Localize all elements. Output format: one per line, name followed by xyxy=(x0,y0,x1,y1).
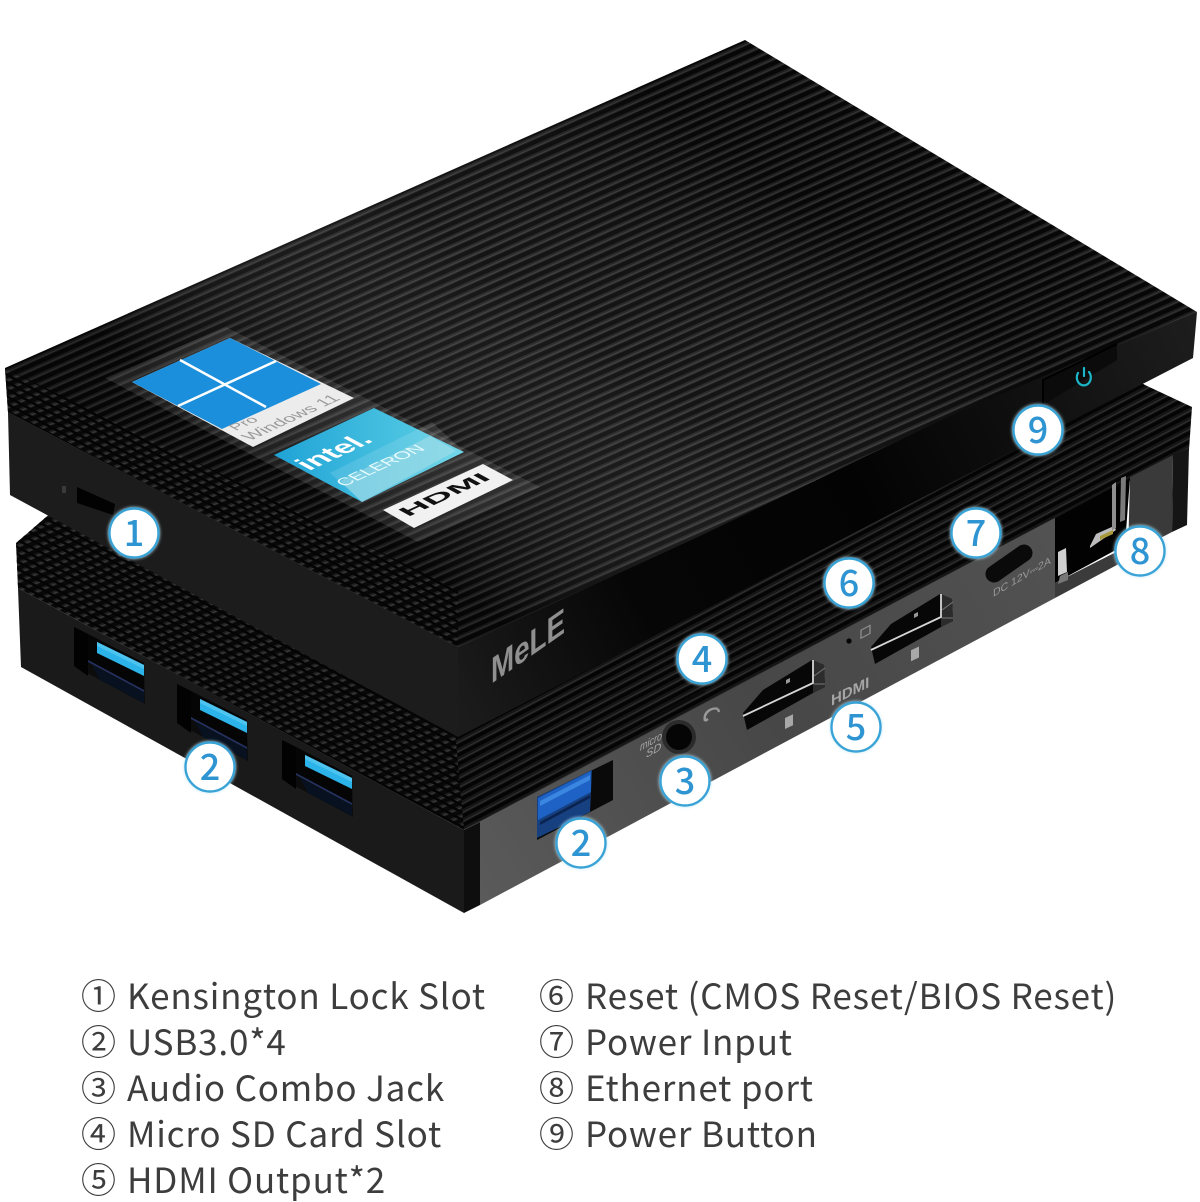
legend: port list: Kensington Lock Slot xyxy=(127,969,486,1020)
intel celeron sticker: intel. xyxy=(288,430,380,474)
callouts xyxy=(110,402,1164,868)
usb ports on left side xyxy=(74,627,353,817)
legend: port list: ⑦ xyxy=(539,1015,575,1066)
callout 9 xyxy=(1014,402,1062,454)
legend: port list: ② xyxy=(81,1015,117,1066)
brand logo: MeLE xyxy=(491,600,565,692)
micro sd label: micro xyxy=(640,728,662,754)
lower unit: finned top left side xyxy=(16,505,470,830)
upper unit: finned left edge xyxy=(5,368,458,647)
legend: port list: ③ xyxy=(81,1061,117,1112)
hdmi sticker xyxy=(383,464,513,528)
legend item 5 xyxy=(81,1153,386,1202)
legend: port list: Reset (CMOS Reset/BIOS Reset) xyxy=(585,969,1117,1020)
icon: headphones xyxy=(705,709,719,721)
callout 4: 4 xyxy=(692,631,712,683)
sticker glossy backing xyxy=(105,327,540,542)
legend item 7 xyxy=(539,1015,793,1066)
legend item 1 xyxy=(81,969,486,1020)
micro sd slot xyxy=(645,688,705,724)
callout 2 plate: 2 xyxy=(571,815,591,867)
icon: power xyxy=(1077,368,1091,385)
callout 7: 7 xyxy=(966,505,986,557)
kensington lock slot xyxy=(62,486,115,515)
hdmi sticker: HDMI xyxy=(393,470,496,519)
reset hole xyxy=(846,638,852,644)
lower unit: bottom lip xyxy=(1055,545,1130,598)
callout 1 xyxy=(110,505,158,558)
legend: port list: ④ xyxy=(81,1107,117,1158)
ethernet port xyxy=(1055,476,1130,584)
upper unit: finned top xyxy=(5,40,1197,647)
lower unit: grey port plate xyxy=(480,518,1055,905)
windows 11 sticker: Windows 11 xyxy=(237,392,345,443)
legend: port list: ⑧ xyxy=(539,1061,575,1112)
lower unit: finned band along port side xyxy=(455,376,1192,830)
legend: port list: Ethernet port xyxy=(585,1061,814,1112)
legend: port list: Power Button xyxy=(585,1107,818,1158)
hdmi port 1 number xyxy=(785,714,793,729)
callout 6 xyxy=(824,555,874,608)
legend item 6 xyxy=(539,969,1117,1020)
callout 2 left: 2 xyxy=(200,739,220,791)
legend: port list: Audio Combo Jack xyxy=(127,1061,445,1112)
callout 8: 8 xyxy=(1130,523,1150,575)
hdmi port 2 xyxy=(871,594,953,664)
legend: port list: ⑥ xyxy=(539,969,575,1020)
upper unit: right flat side xyxy=(458,312,1197,737)
legend item 8 xyxy=(539,1061,814,1112)
windows 11 sticker xyxy=(132,338,354,447)
legend: port list: ⑨ xyxy=(539,1107,575,1158)
callout 4 xyxy=(678,631,726,684)
legend item 4 xyxy=(81,1107,442,1158)
dc label: DC 12V⎓2A xyxy=(993,555,1051,600)
micro sd label xyxy=(640,728,662,761)
legend: port list: Power Input xyxy=(585,1015,793,1066)
intel celeron sticker: CELERON xyxy=(331,442,429,489)
lower unit: corner post xyxy=(464,822,480,913)
upper unit xyxy=(5,40,1197,737)
callout 9: 9 xyxy=(1028,402,1048,454)
callout 3: 3 xyxy=(675,753,695,805)
callout 6: 6 xyxy=(839,555,859,607)
lower unit xyxy=(16,376,1192,913)
hdmi port 2 number xyxy=(911,646,919,661)
usb-c power input xyxy=(994,553,1024,574)
legend item 9 xyxy=(539,1107,818,1158)
power button xyxy=(1043,344,1117,405)
reset icon xyxy=(861,625,870,638)
callout 3 xyxy=(660,753,710,806)
callout 7 xyxy=(952,505,1000,558)
windows 11 sticker: Pro xyxy=(225,414,263,433)
callout 2 plate xyxy=(556,815,606,868)
lower unit: right grey panel xyxy=(1128,455,1173,555)
legend: port list xyxy=(81,969,1117,1202)
hdmi label: HDMI xyxy=(831,675,869,710)
stickers panel xyxy=(105,327,540,542)
upper unit: left flat side xyxy=(8,412,458,737)
intel celeron sticker xyxy=(274,408,464,502)
legend item 3 xyxy=(81,1061,445,1112)
lower unit: right dark strip xyxy=(1172,448,1189,532)
lower unit: left flat side xyxy=(18,588,464,913)
usb port on plate xyxy=(537,760,613,840)
legend: port list: USB3.0*4 xyxy=(127,1015,287,1066)
legend: port list: ① xyxy=(81,969,117,1020)
micro sd label: SD xyxy=(646,739,662,761)
callout 5: 5 xyxy=(846,699,866,751)
callout 5 xyxy=(832,699,880,752)
legend: port list: Micro SD Card Slot xyxy=(127,1107,442,1158)
hdmi port 1 xyxy=(743,660,825,730)
audio jack xyxy=(662,720,696,754)
callout 2 left xyxy=(186,739,234,792)
callout 8 xyxy=(1116,523,1164,576)
legend item 2 xyxy=(81,1015,287,1066)
callout 1: 1 xyxy=(124,505,144,557)
product illustration: mini PC shown top and bottom xyxy=(5,40,1197,913)
